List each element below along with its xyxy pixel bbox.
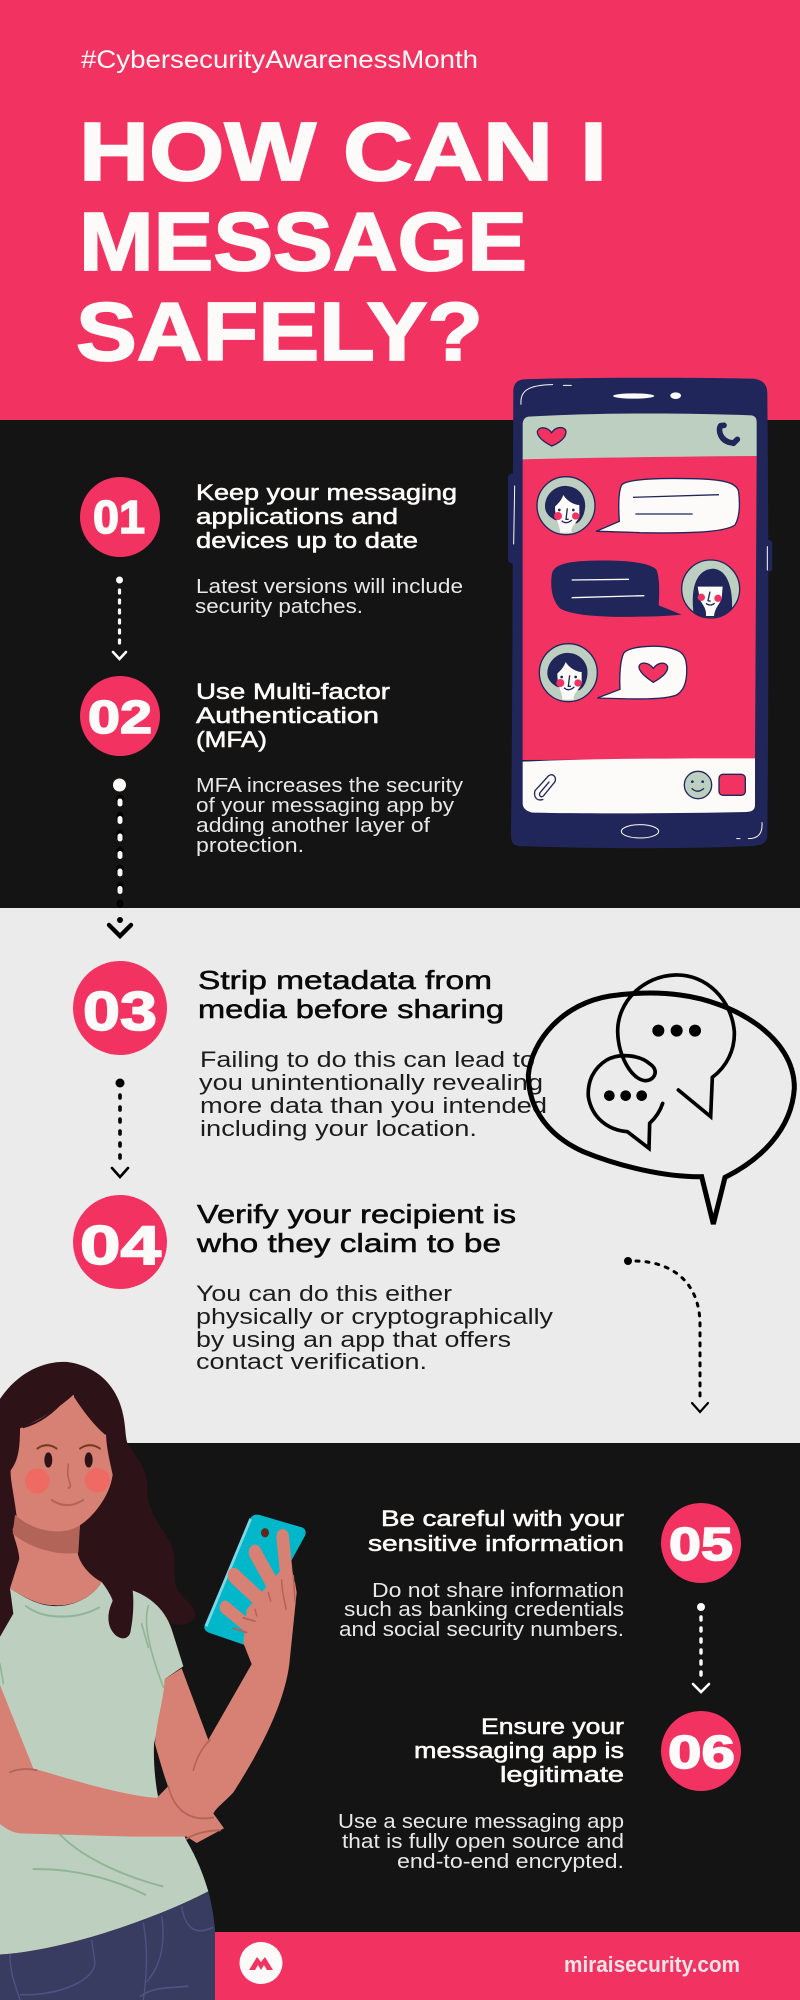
body 02: adding another layer of — [196, 815, 431, 837]
body 05: and social security numbers. — [339, 1619, 624, 1641]
heading 03: Strip metadata from — [198, 965, 492, 995]
number badge 02 — [80, 676, 160, 756]
heading 01: devices up to date — [196, 528, 418, 553]
avatar 2 — [682, 560, 740, 618]
arms — [0, 1537, 297, 1843]
panel: pink header background — [0, 0, 800, 420]
number badge 01 — [80, 477, 160, 557]
step 02 — [80, 676, 463, 857]
heading 01: applications and — [196, 504, 398, 529]
top app bar — [523, 413, 757, 459]
heading 05: Be careful with your — [381, 1506, 624, 1531]
heading 01 — [196, 480, 457, 553]
step 03 — [73, 961, 547, 1141]
body 03: including your location. — [200, 1116, 477, 1141]
call icon — [720, 425, 737, 443]
heading 05 — [368, 1506, 624, 1556]
heading 02: Use Multi-factor — [196, 679, 390, 704]
body 05: Do not share information — [372, 1580, 624, 1602]
title: MESSAGE — [79, 195, 527, 288]
white chat bubble with heart — [597, 646, 687, 699]
arrow 01 to 02 — [113, 576, 126, 659]
number badge 04 — [73, 1195, 167, 1289]
body 03: you unintentionally revealing — [199, 1070, 543, 1095]
heading 06: messaging app is — [414, 1738, 624, 1763]
body 03: Failing to do this can lead to — [200, 1047, 535, 1072]
body 04 — [196, 1281, 553, 1374]
body 01 — [195, 576, 463, 618]
panel: grey section — [0, 908, 800, 1443]
heading 03: media before sharing — [198, 994, 504, 1024]
panel: black section bottom — [0, 1443, 800, 1932]
brows, nose, mouth and fringe lines — [23, 1385, 105, 1505]
number badge 05 — [661, 1503, 741, 1583]
body 01: Latest versions will include — [196, 576, 463, 598]
avatar 1 — [537, 477, 595, 535]
heart icon — [537, 428, 566, 446]
hashtag: #CybersecurityAwarenessMonth — [81, 46, 478, 74]
jeans — [0, 1891, 215, 2000]
body 04: You can do this either — [196, 1281, 452, 1306]
illustration: woman holding phone — [0, 1362, 306, 2000]
avatar 3 — [539, 644, 597, 702]
number badge 06 — [661, 1711, 741, 1791]
arrow 02 to 03 — [109, 778, 131, 936]
footer logo — [240, 1942, 282, 1984]
body 04: by using an app that offers — [196, 1327, 511, 1352]
heading 05: sensitive information — [368, 1531, 624, 1556]
step 01 — [80, 477, 463, 618]
fingers — [225, 1537, 288, 1630]
body 04: contact verification. — [196, 1349, 427, 1374]
icon: phone illustration with chat — [508, 378, 772, 848]
t-shirt — [0, 1582, 208, 1955]
number badge 03: 03 — [83, 980, 157, 1042]
curved arrow toward step 05 — [624, 1257, 708, 1412]
phone in hand — [204, 1515, 306, 1645]
title: HOW CAN I — [79, 105, 607, 198]
arrow 03 to 04 — [112, 1078, 128, 1177]
body 06: that is fully open source and — [342, 1831, 624, 1853]
body 01: security patches. — [195, 596, 363, 618]
body 03 — [199, 1047, 547, 1141]
body 05 — [339, 1580, 624, 1641]
step 04 — [73, 1195, 553, 1374]
footer url: miraisecurity.com — [564, 1952, 740, 1977]
body 02 — [196, 775, 463, 857]
neck and face — [10, 1385, 113, 1605]
panel: pink footer — [0, 1932, 800, 2000]
shirt folds — [0, 1606, 163, 1895]
heading 04: who they claim to be — [196, 1228, 501, 1258]
number badge 06: 06 — [668, 1726, 735, 1778]
body 02: MFA increases the security — [196, 775, 463, 797]
smiley icon — [684, 771, 712, 799]
heading 06: Ensure your — [481, 1714, 624, 1739]
crossing forearm — [0, 1685, 224, 1843]
speaker and camera — [613, 392, 681, 399]
step 06 — [338, 1711, 741, 1873]
panel: black section top — [0, 420, 800, 908]
heading 02 — [196, 679, 390, 752]
bottom input bar — [523, 758, 755, 813]
number badge 01: 01 — [93, 491, 145, 543]
heading 02: (MFA) — [196, 727, 267, 752]
number badge 02: 02 — [88, 691, 152, 743]
body 06 — [338, 1811, 624, 1873]
title — [76, 105, 607, 378]
body 05: such as banking credentials — [344, 1599, 624, 1621]
step 05 — [339, 1503, 741, 1641]
paperclip icon — [535, 775, 555, 800]
back hair — [0, 1362, 195, 1640]
eyes — [44, 1452, 93, 1468]
neck shadow — [13, 1515, 80, 1554]
dark chat bubble — [551, 561, 682, 617]
body 06: Use a secure messaging app — [338, 1811, 624, 1833]
body 06: end-to-end encrypted. — [397, 1851, 624, 1873]
heading 04: Verify your recipient is — [197, 1199, 516, 1229]
arrow 05 to 06 — [693, 1603, 709, 1692]
icon: nested speech bubbles — [528, 975, 794, 1224]
number badge 04: 04 — [80, 1214, 162, 1276]
raised arm and hand — [155, 1567, 297, 1819]
phone body — [511, 378, 768, 848]
send button — [719, 774, 745, 795]
title: SAFELY? — [76, 285, 483, 378]
heading 04 — [196, 1199, 516, 1258]
body 02: of your messaging app by — [196, 795, 454, 817]
number badge 05: 05 — [669, 1518, 733, 1570]
heading 03 — [198, 965, 504, 1024]
body 04: physically or cryptographically — [196, 1304, 553, 1329]
cheeks — [25, 1468, 110, 1494]
heading 01: Keep your messaging — [196, 480, 457, 505]
phone highlights — [514, 385, 767, 839]
body 03: more data than you intended — [200, 1093, 547, 1118]
body 02: protection. — [196, 835, 304, 857]
heading 06 — [414, 1714, 624, 1787]
phone side buttons — [508, 473, 772, 572]
number badge 03 — [73, 961, 167, 1055]
heading 02: Authentication — [196, 703, 379, 728]
arm creases — [10, 1576, 295, 1839]
heading 06: legitimate — [500, 1762, 624, 1787]
white chat bubble 1 — [596, 478, 739, 533]
phone screen — [523, 456, 757, 760]
